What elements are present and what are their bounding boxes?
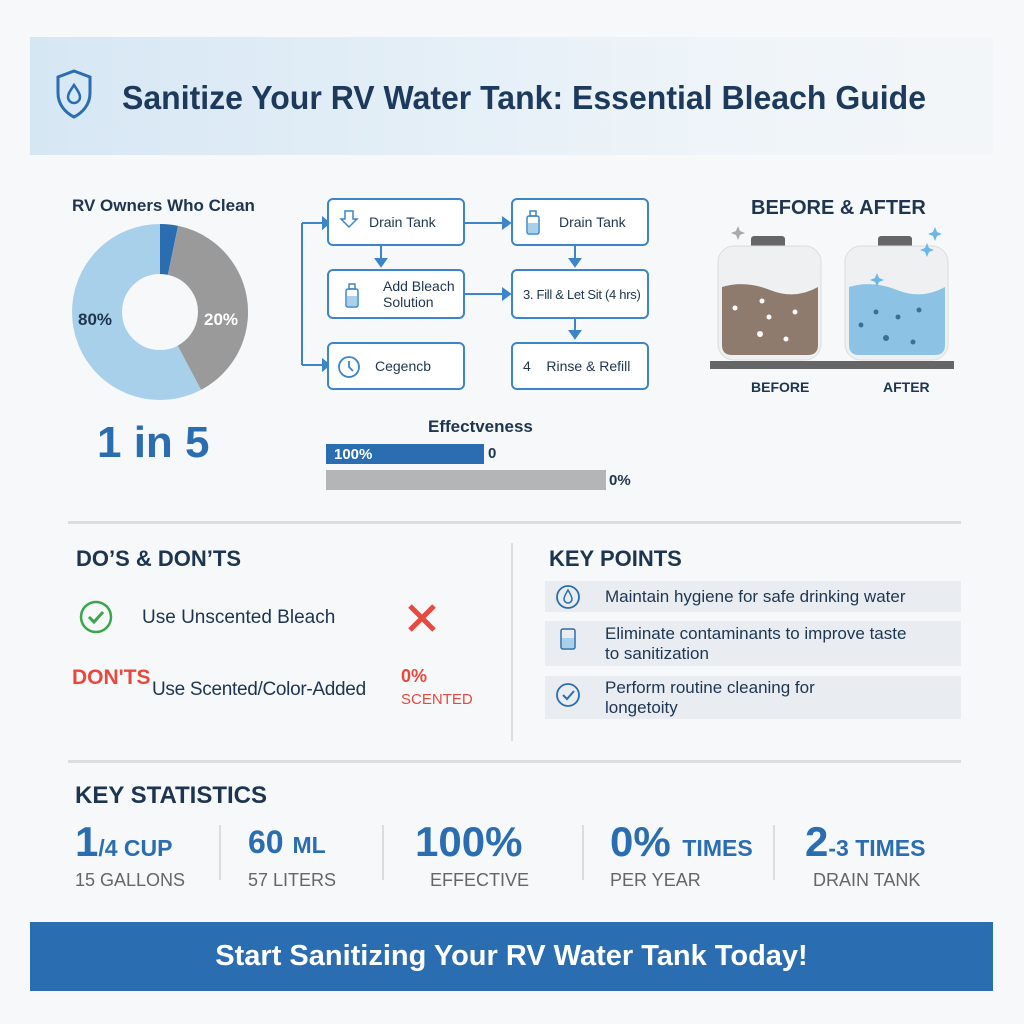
- step: add bleach: Add Bleach: [383, 278, 455, 294]
- bar chart: effectiveness: 0%: [609, 472, 631, 489]
- panel: do's & don'ts: SCENTED: [401, 691, 473, 708]
- step: drain tank 2: Drain Tank: [559, 214, 626, 230]
- text: to sanitization: [605, 644, 709, 662]
- panel: do's & don'ts: 0%: [401, 666, 427, 686]
- text: 100%: [415, 818, 522, 865]
- step: drain tank 2: [511, 198, 649, 246]
- panel: donut chart: 80%: [78, 310, 112, 329]
- text: longetoity: [605, 698, 678, 716]
- panel: key statistics: KEY STATISTICS: [75, 782, 267, 809]
- text: 15 GALLONS: [75, 870, 185, 890]
- text: PER YEAR: [610, 870, 701, 890]
- header band: [30, 37, 993, 155]
- text: 1/4 CUP: [75, 818, 172, 865]
- panel: key points: KEY POINTS: [549, 546, 682, 571]
- step: add bleach: Solution: [383, 294, 434, 310]
- panel: donut chart: [72, 196, 255, 467]
- step: fill: 3. Fill & Let Sit (4 hrs): [523, 286, 640, 302]
- step: drain tank: Drain Tank: [369, 214, 436, 230]
- panel: do's & don'ts: DON'TS: [72, 666, 150, 689]
- footer banner: Start Sanitizing Your RV Water Tank Today!: [215, 940, 808, 972]
- text: Perform routine cleaning for: [605, 678, 815, 696]
- step: fill: [511, 269, 649, 319]
- step: add bleach: [327, 269, 465, 319]
- bar chart: effectiveness: [326, 417, 631, 490]
- panel: donut chart: 20%: [204, 310, 238, 329]
- panel: do's & don'ts: DO’S & DON’TS: [76, 546, 241, 571]
- panel: before & after: AFTER: [883, 379, 930, 395]
- panel: do's & don'ts: Use Unscented Bleach: [142, 607, 335, 628]
- title: Sanitize Your RV Water Tank: Essential Bleach Guide: [122, 79, 926, 116]
- footer banner: [30, 922, 993, 991]
- step: clock: Cegencb: [375, 358, 431, 374]
- text: EFFECTIVE: [430, 870, 529, 890]
- panel: before & after: BEFORE: [751, 379, 809, 395]
- text: DRAIN TANK: [813, 870, 920, 890]
- step: clock: [327, 342, 465, 390]
- text: 0% TIMES: [610, 818, 753, 865]
- panel: donut chart: RV Owners Who Clean: [72, 196, 255, 215]
- step: rinse: 4 Rinse & Refill: [523, 358, 630, 374]
- panel: do's & don'ts: Use Scented/Color-Added: [152, 679, 366, 700]
- text: Eliminate contaminants to improve taste: [605, 624, 906, 642]
- icon: check: [80, 600, 112, 634]
- text: 57 LITERS: [248, 870, 336, 890]
- bar chart: effectiveness: Effectveness: [428, 417, 533, 436]
- text: Maintain hygiene for safe drinking water: [605, 586, 906, 606]
- text: 2-3 TIMES: [805, 818, 925, 865]
- icon: shield: [56, 69, 92, 119]
- step: drain tank: [327, 198, 465, 246]
- panel: before & after: [710, 197, 954, 395]
- step: rinse: [511, 342, 649, 390]
- text: 60 ML: [248, 824, 326, 860]
- flowchart: [301, 198, 649, 390]
- bar chart: effectiveness: 0: [488, 445, 496, 462]
- panel: donut chart: 1 in 5: [97, 418, 210, 467]
- bar chart: effectiveness: 100%: [334, 446, 372, 463]
- panel: do's & don'ts: [72, 546, 473, 708]
- icon: cross: [408, 604, 436, 632]
- panel: before & after: BEFORE & AFTER: [751, 197, 926, 219]
